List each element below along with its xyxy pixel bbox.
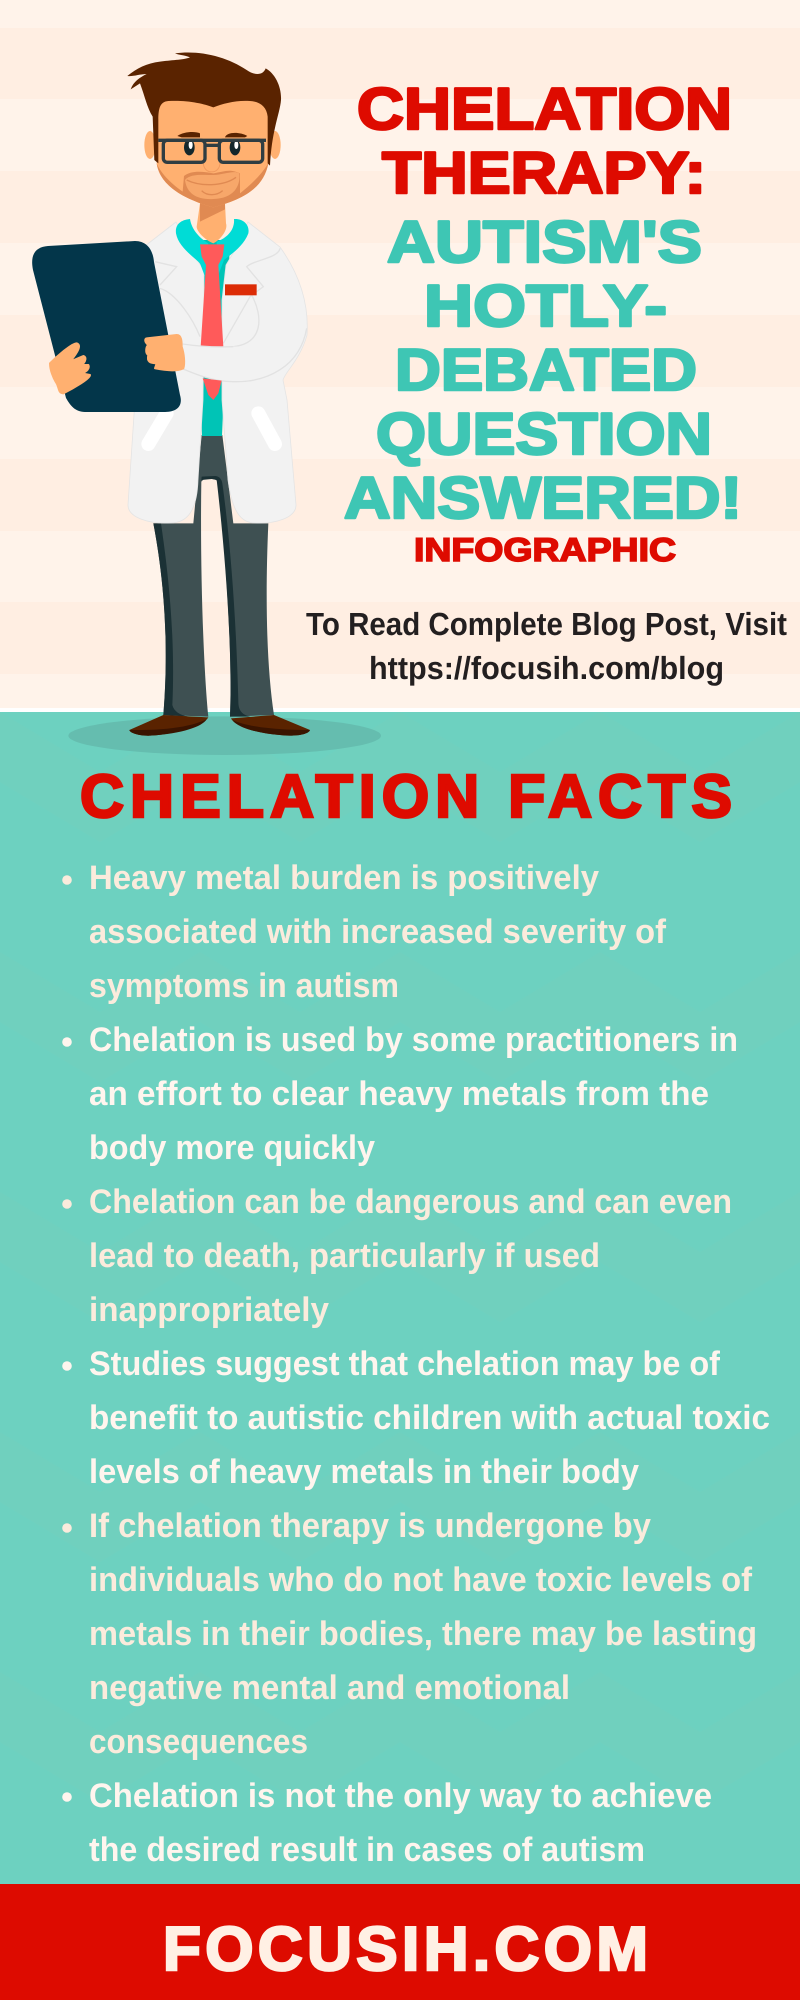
- bullet: heavy metal burden: Heavy metal burden is positively: [89, 859, 599, 897]
- icon: doctor holding tablet: [32, 52, 381, 755]
- bullet: lasting negative consequences: metals in their bodies, there may be lasting: [89, 1615, 757, 1653]
- shirt: [196, 240, 230, 436]
- subtitle: Autism's hotly-debated question answered: QUESTION: [376, 401, 712, 467]
- bullet: heavy metal burden: [62, 859, 667, 1005]
- subtitle: Autism's hotly-debated question answered: DEBATED: [395, 337, 697, 403]
- subtitle: Autism's hotly-debated question answered: ANSWERED!: [344, 465, 742, 531]
- lapel lines: [155, 248, 280, 347]
- bullet: clearing heavy metals: [62, 1021, 738, 1167]
- footer band: [0, 1884, 800, 2000]
- ground shadow: [68, 716, 381, 755]
- face: [157, 101, 268, 207]
- bullet: studies on benefit: [62, 1345, 770, 1491]
- trousers and shoes: [129, 435, 310, 736]
- coat sleeve: [182, 317, 307, 382]
- goatee area: [185, 172, 239, 199]
- text: blog post link: https://focusih.com/blog: [369, 650, 724, 686]
- hair: [127, 52, 281, 166]
- bullet: lasting negative consequences: individuals who do not have toxic levels of: [89, 1561, 753, 1599]
- title: Chelation Therapy: [357, 76, 732, 206]
- bullet: dangers of chelation: [62, 1183, 732, 1329]
- subtitle: Autism's hotly-debated question answered: AUTISM'S: [387, 209, 702, 275]
- bullet: not the only way: the desired result in cases of autism: [89, 1831, 645, 1869]
- lower tie: [203, 378, 222, 400]
- bullet: studies on benefit: levels of heavy metals in their body: [89, 1453, 639, 1491]
- bullet: not the only way: Chelation is not the only way to achieve: [89, 1777, 712, 1815]
- eyes: [184, 139, 195, 155]
- ears: [144, 131, 156, 159]
- panel: teal facts background: [0, 712, 800, 1884]
- footer text: focusih.com: FOCUSIH.COM: [163, 1915, 648, 1984]
- glasses: [158, 140, 266, 162]
- bullet: lasting negative consequences: negative mental and emotional: [89, 1669, 570, 1707]
- tablet: [32, 241, 181, 412]
- lab coat: [128, 222, 307, 523]
- title: Chelation Therapy: CHELATION: [357, 76, 732, 142]
- upper body details: [127, 52, 307, 400]
- label: Infographic: INFOGRAPHIC: [414, 531, 676, 568]
- nose: [203, 163, 220, 172]
- bullet: dangers of chelation: Chelation can be dangerous and can even: [89, 1183, 732, 1221]
- bullet: clearing heavy metals: Chelation is used by some practitioners in: [89, 1021, 738, 1059]
- bullet: not the only way: [62, 1777, 712, 1869]
- bullet: dangers of chelation: inappropriately: [89, 1291, 329, 1329]
- bullet: dangers of chelation: lead to death, particularly if used: [89, 1237, 600, 1275]
- name badge: [225, 284, 257, 295]
- heading: Chelation Facts: CHELATION FACTS: [80, 762, 732, 830]
- bullet: heavy metal burden: associated with increased severity of: [89, 913, 667, 951]
- hands: [50, 335, 184, 393]
- bullet: lasting negative consequences: If chelation therapy is undergone by: [89, 1507, 651, 1545]
- bullet: clearing heavy metals: body more quickly: [89, 1129, 375, 1167]
- eyebrows: [177, 132, 200, 137]
- title: Chelation Therapy: THERAPY:: [382, 140, 706, 206]
- bullet: lasting negative consequences: consequences: [89, 1723, 308, 1761]
- bullet: studies on benefit: Studies suggest that chelation may be of: [89, 1345, 721, 1383]
- collar: [176, 219, 208, 277]
- neck: [197, 203, 226, 243]
- bullet: studies on benefit: benefit to autistic children with actual toxic: [89, 1399, 770, 1437]
- bullet: lasting negative consequences: [62, 1507, 757, 1761]
- text: blog post link: [306, 606, 787, 686]
- bullet: clearing heavy metals: an effort to clear heavy metals from the: [89, 1075, 709, 1113]
- coat pockets: [148, 413, 275, 444]
- panel: striped cream header background: [0, 0, 800, 712]
- bullet: heavy metal burden: symptoms in autism: [89, 967, 399, 1005]
- subtitle: Autism's hotly-debated question answered: [344, 209, 742, 531]
- tie: [200, 244, 224, 347]
- subtitle: Autism's hotly-debated question answered: HOTLY-: [424, 273, 667, 339]
- beard: [157, 163, 268, 207]
